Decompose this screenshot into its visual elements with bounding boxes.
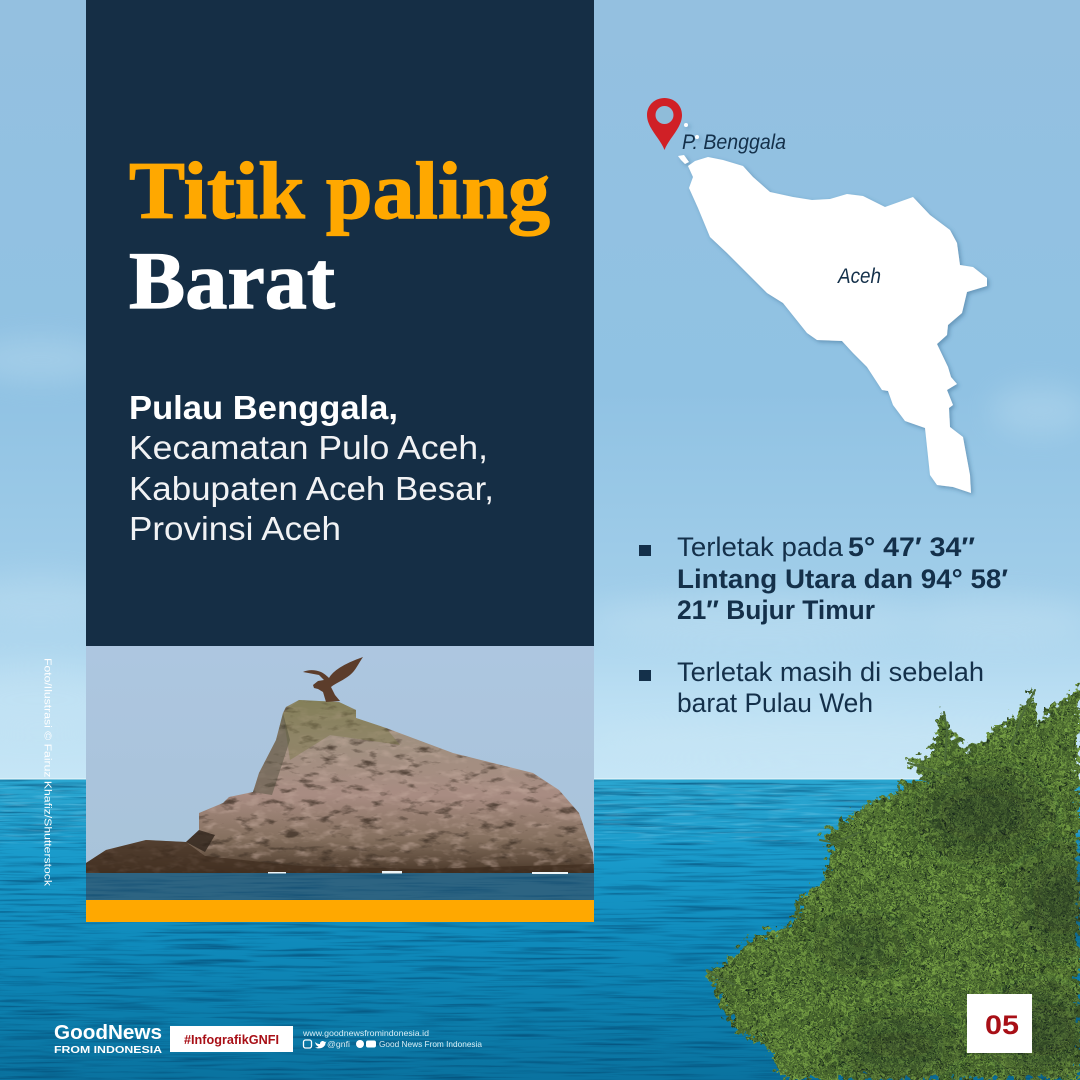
logo: GoodNews From Indonesia: FROM INDONESIA	[54, 1044, 162, 1056]
page number: 05	[985, 1010, 1019, 1040]
background: clouds	[0, 338, 1080, 762]
footer contacts	[302, 1028, 482, 1049]
location text: Kabupaten Aceh Besar,	[129, 470, 494, 507]
footer contacts: www.goodnewsfromindonesia.id	[302, 1028, 429, 1038]
footer contacts: @gnfi	[327, 1039, 350, 1049]
location text: Provinsi Aceh	[129, 510, 341, 547]
background: sea	[0, 778, 1080, 1080]
logo: GoodNews From Indonesia	[54, 1022, 162, 1056]
heading: titik paling: Titik paling	[129, 145, 550, 236]
icon: twitter	[315, 1041, 326, 1048]
footer contacts: Good News From Indonesia	[379, 1039, 482, 1049]
tree sprigs	[707, 690, 1035, 985]
map: Aceh province	[678, 123, 987, 493]
photo: Pulau Benggala rock with eagle statue	[86, 646, 594, 900]
heading: barat: Barat	[129, 235, 335, 326]
hashtag box: #InfografikGNFI	[184, 1033, 279, 1047]
hashtag box	[170, 1026, 293, 1052]
orange bar	[86, 900, 594, 922]
photo credit: Foto/Ilustrasi © Fairuz Khafiz/Shutterstock	[42, 658, 54, 887]
background: sky	[0, 0, 1080, 779]
bullet 1: Terletak pada	[677, 532, 844, 562]
logo: GoodNews From Indonesia: GoodNews	[54, 1022, 162, 1044]
bullet 1: Lintang Utara dan 94° 58′	[677, 564, 1008, 594]
bullet 1	[639, 532, 1008, 625]
bullet 2: barat Pulau Weh	[677, 688, 873, 718]
location text: Pulau Benggala,	[129, 389, 398, 426]
panel: title and location	[86, 0, 594, 646]
tree shadow masses	[818, 775, 1080, 1071]
tree	[707, 687, 1080, 1080]
bullet 2	[639, 657, 984, 718]
icon: map pin	[647, 98, 682, 150]
bullet list: facts	[639, 532, 1008, 718]
bullet 1: 21″ Bujur Timur	[677, 595, 875, 625]
bullet 1: 5° 47′ 34″	[848, 532, 975, 562]
bullet 2: Terletak masih di sebelah	[677, 657, 984, 687]
icon: facebook	[356, 1040, 364, 1048]
label: P. Benggala: P. Benggala	[682, 131, 786, 154]
icon: youtube	[366, 1040, 376, 1048]
surf	[268, 871, 568, 874]
icon: instagram	[304, 1040, 312, 1048]
icon: eagle statue	[303, 657, 363, 702]
label: Aceh: Aceh	[836, 265, 881, 288]
location text	[129, 389, 494, 547]
location text: Kecamatan Pulo Aceh,	[129, 429, 488, 466]
page number	[967, 994, 1032, 1053]
